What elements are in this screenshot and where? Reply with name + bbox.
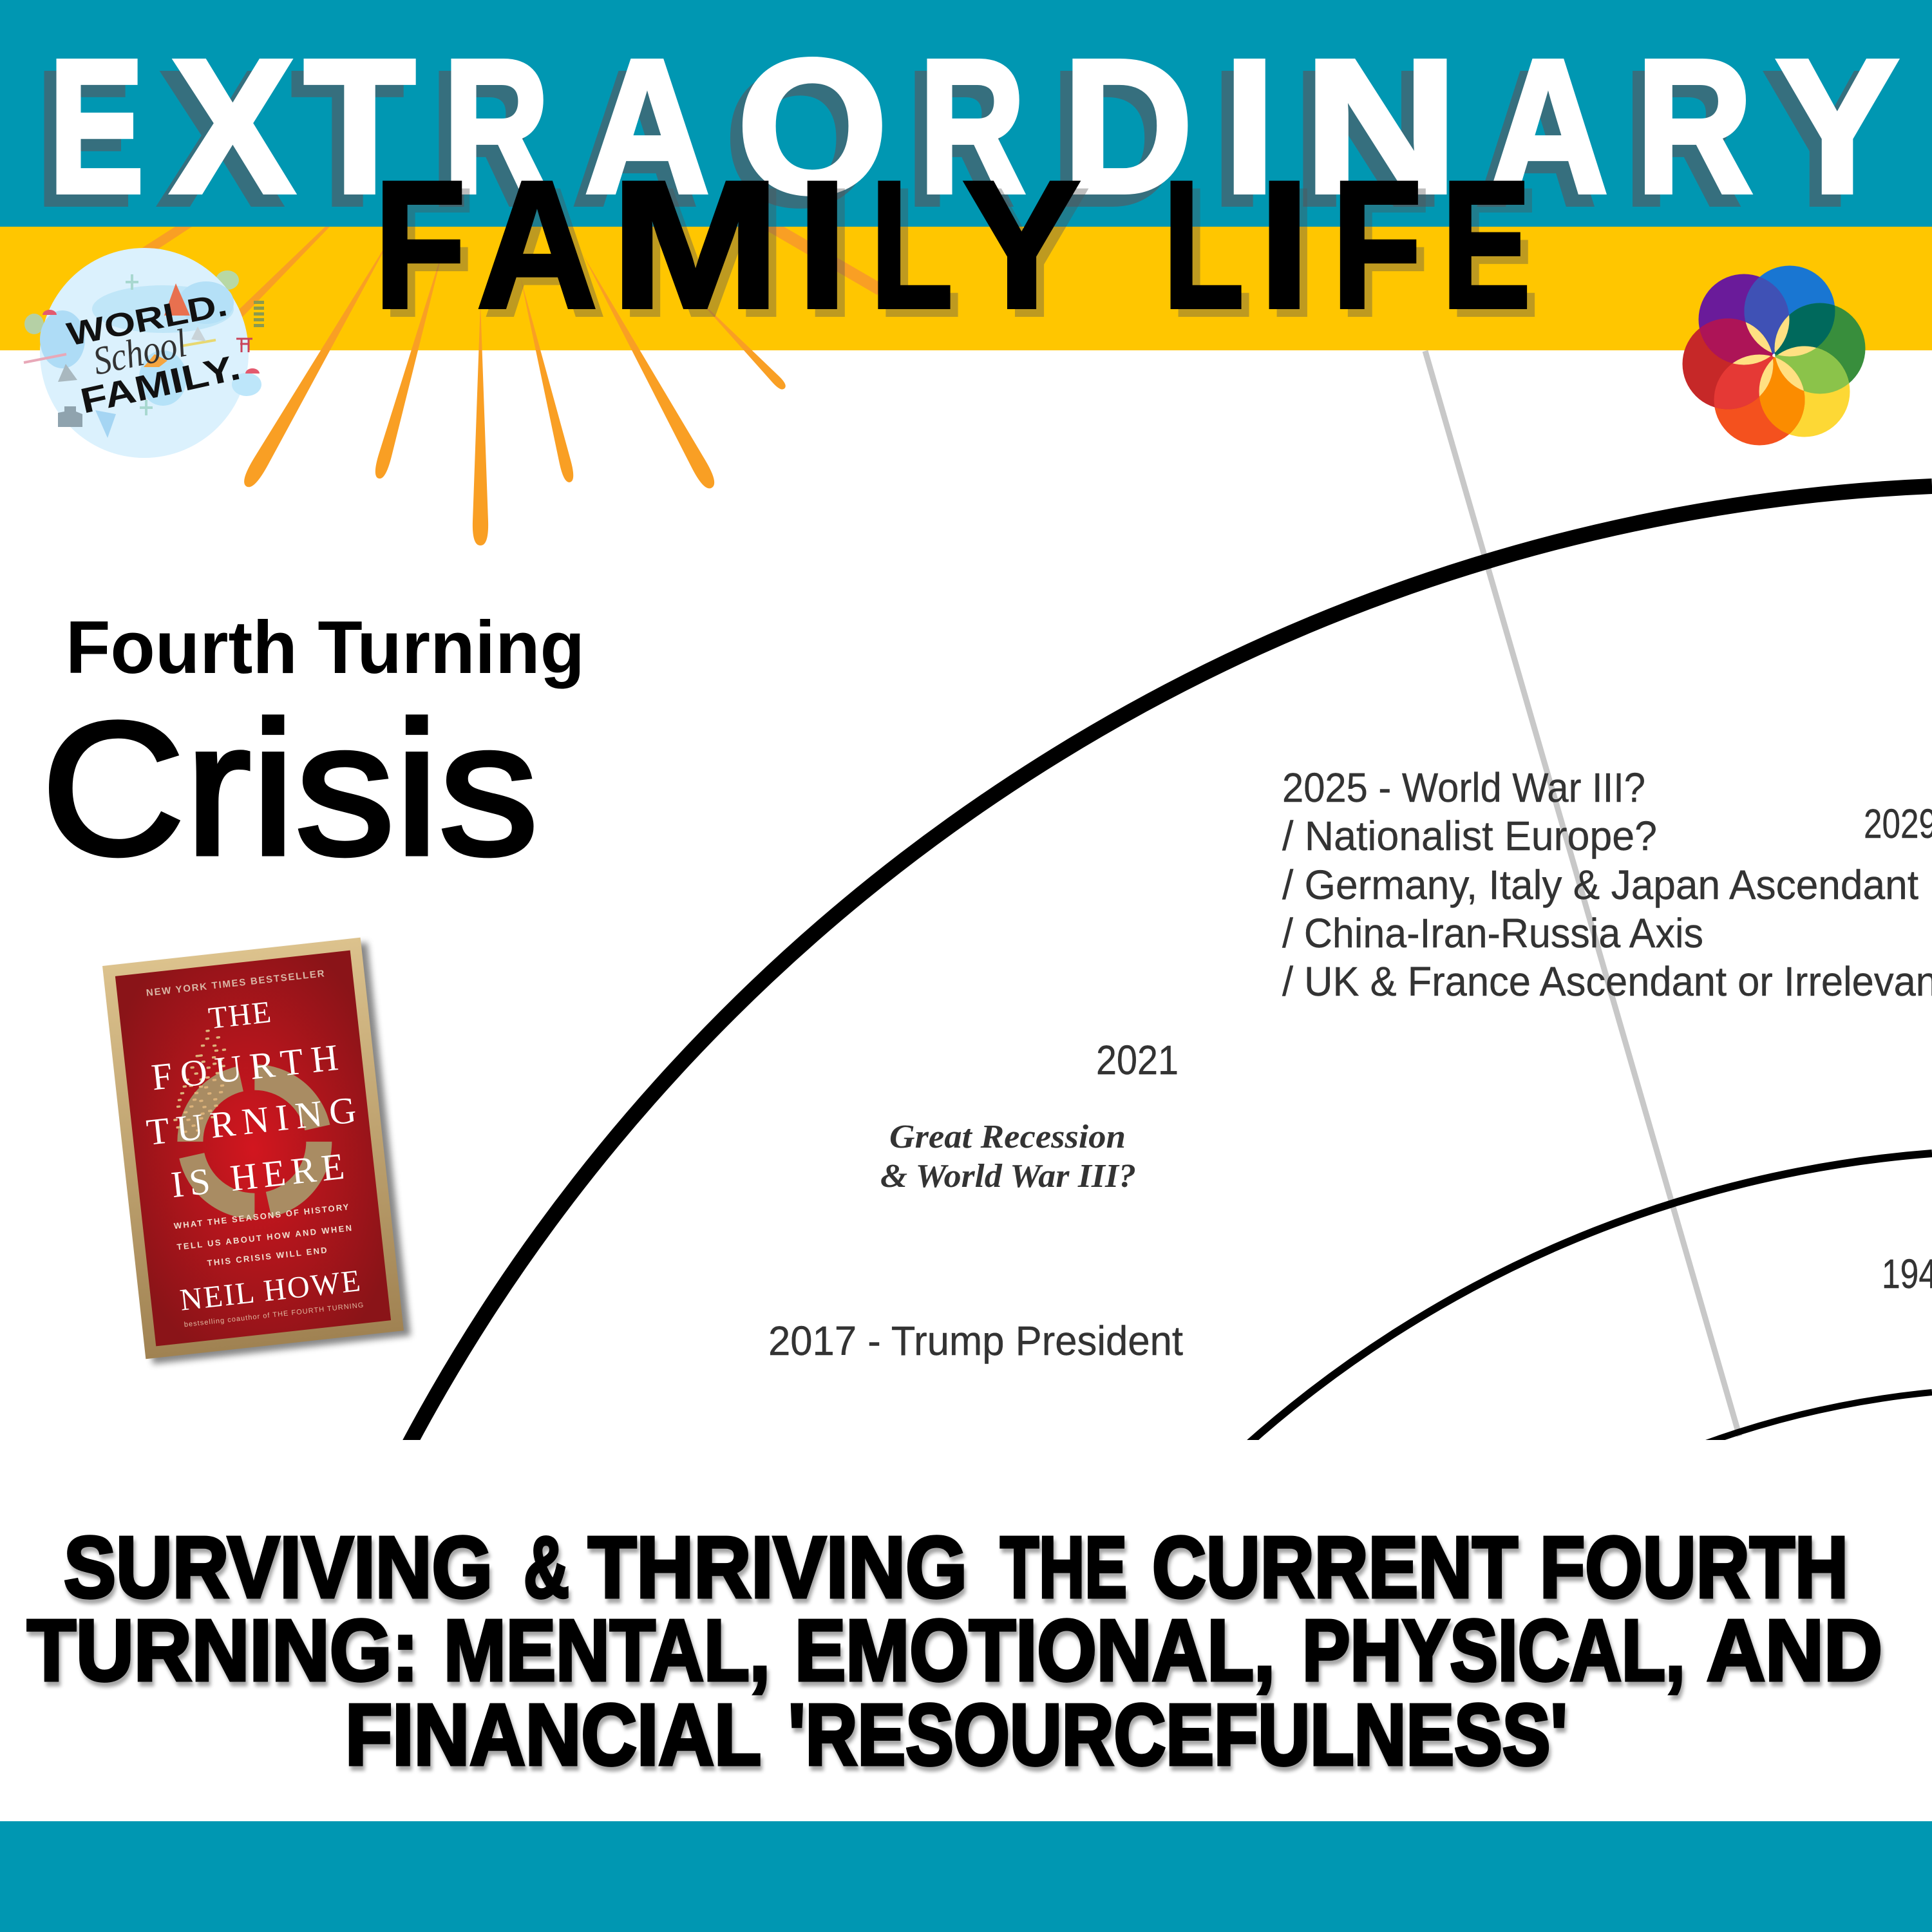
logo wordmark: School — [90, 321, 191, 384]
bottom title: THE — [1000, 1519, 1127, 1616]
book cover — [102, 937, 411, 1365]
timeline label: 2025 list: / China-Iran-Russia Axis — [1282, 910, 1703, 956]
book text: TURNING — [144, 1088, 358, 1153]
headline: FAMILY LIFE: E — [1442, 144, 1531, 346]
bottom title: FINANCIAL — [345, 1686, 760, 1783]
book text: THE — [207, 995, 272, 1036]
teal header band — [0, 0, 1932, 227]
book text: NEIL HOWE — [178, 1264, 362, 1318]
headline: EXTRAORDINARY: D — [1063, 20, 1193, 232]
headline: FAMILY LIFE: L — [1163, 144, 1244, 346]
timeline label: 2025 list: / Germany, Italy & Japan Ascendant — [1282, 862, 1918, 908]
logo: World School Family globe — [24, 248, 261, 458]
timeline label: 2025 list: 2025 - World War III? — [1282, 764, 1645, 811]
icon: rainbow flower — [1682, 265, 1865, 446]
headline: EXTRAORDINARY: R — [919, 20, 1025, 232]
logo wordmark — [64, 286, 244, 421]
headline: EXTRAORDINARY: N — [1304, 20, 1458, 232]
bottom title: EMOTIONAL, — [795, 1602, 1275, 1699]
book text: IS HERE — [169, 1145, 346, 1206]
logo wordmark: FAMILY. — [77, 347, 244, 421]
timeline label: 2025 list — [1282, 764, 1932, 1005]
bottom title — [27, 1519, 1882, 1783]
headline: EXTRAORDINARY: A — [1488, 20, 1608, 232]
gray radial line — [1425, 351, 1739, 1436]
timeline label: 2017: 2017 - Trump President — [768, 1318, 1183, 1364]
concentric arcs — [408, 486, 1932, 1446]
headline: EXTRAORDINARY: O — [737, 20, 887, 232]
headline: EXTRAORDINARY: R — [1636, 20, 1752, 232]
headline: FAMILY LIFE — [374, 144, 1531, 346]
headline: EXTRAORDINARY: E — [49, 20, 144, 232]
bottom title: CURRENT — [1152, 1519, 1518, 1616]
book gold dust — [165, 1029, 234, 1133]
logo map shapes — [24, 274, 261, 438]
bottom title: 'RESOURCEFULNESS' — [788, 1686, 1567, 1783]
book text: FOURTH — [149, 1036, 340, 1098]
bottom title: AND — [1707, 1602, 1882, 1699]
headline: FAMILY LIFE: F — [1332, 144, 1422, 346]
era label: Great Recession: Great Recession — [889, 1119, 1126, 1155]
bottom title: MENTAL, — [444, 1602, 770, 1699]
timeline label: 2025 list: / Nationalist Europe? — [1282, 813, 1657, 859]
headline: EXTRAORDINARY: I — [1224, 20, 1275, 232]
headline: EXTRAORDINARY: Y — [1776, 20, 1899, 232]
headline: FAMILY LIFE: F — [374, 144, 466, 346]
headline: EXTRAORDINARY — [49, 20, 1899, 232]
headline: EXTRAORDINARY: X — [171, 20, 295, 232]
starburst rays — [132, 227, 884, 545]
bottom title: PHYSICAL, — [1302, 1602, 1685, 1699]
era label: Great Recession: & World War III? — [880, 1158, 1136, 1195]
book text: bestselling coauthor of THE FOURTH TURNING — [184, 1302, 364, 1329]
book text — [131, 966, 378, 1331]
headline: FAMILY LIFE: I — [797, 144, 848, 346]
headline: EXTRAORDINARY: A — [585, 20, 710, 232]
heading: Crisis: Crisis — [41, 683, 538, 895]
book target ring — [184, 1070, 326, 1213]
bottom teal band — [0, 1821, 1932, 1932]
headline: FAMILY LIFE: A — [477, 144, 598, 346]
yellow header band — [0, 227, 1932, 350]
headline: FAMILY LIFE: L — [871, 144, 953, 346]
timeline label: 2021: 2021 — [1096, 1037, 1179, 1083]
bottom title: SURVIVING — [64, 1519, 493, 1616]
book text: THIS CRISIS WILL END — [207, 1245, 327, 1268]
heading: Fourth Turning: Fourth Turning — [66, 605, 585, 689]
headline: FAMILY LIFE: I — [1258, 144, 1310, 346]
bottom title: TURNING: — [27, 1602, 419, 1699]
book text: WHAT THE SEASONS OF HISTORY — [173, 1202, 349, 1231]
book text: NEW YORK TIMES BESTSELLER — [146, 968, 325, 999]
headline: FAMILY LIFE: Y — [963, 144, 1079, 346]
bottom title: FOURTH — [1540, 1519, 1848, 1616]
white lower panel — [0, 1440, 1932, 1821]
headline: FAMILY LIFE: M — [611, 144, 780, 346]
bottom title: & — [524, 1519, 569, 1616]
headline: EXTRAORDINARY: T — [304, 20, 415, 232]
bottom title: THRIVING — [588, 1519, 967, 1616]
era label: Great Recession — [880, 1119, 1136, 1195]
logo wordmark: WORLD. — [64, 286, 230, 353]
book text: TELL US ABOUT HOW AND WHEN — [176, 1223, 352, 1252]
headline: EXTRAORDINARY: R — [443, 20, 549, 232]
